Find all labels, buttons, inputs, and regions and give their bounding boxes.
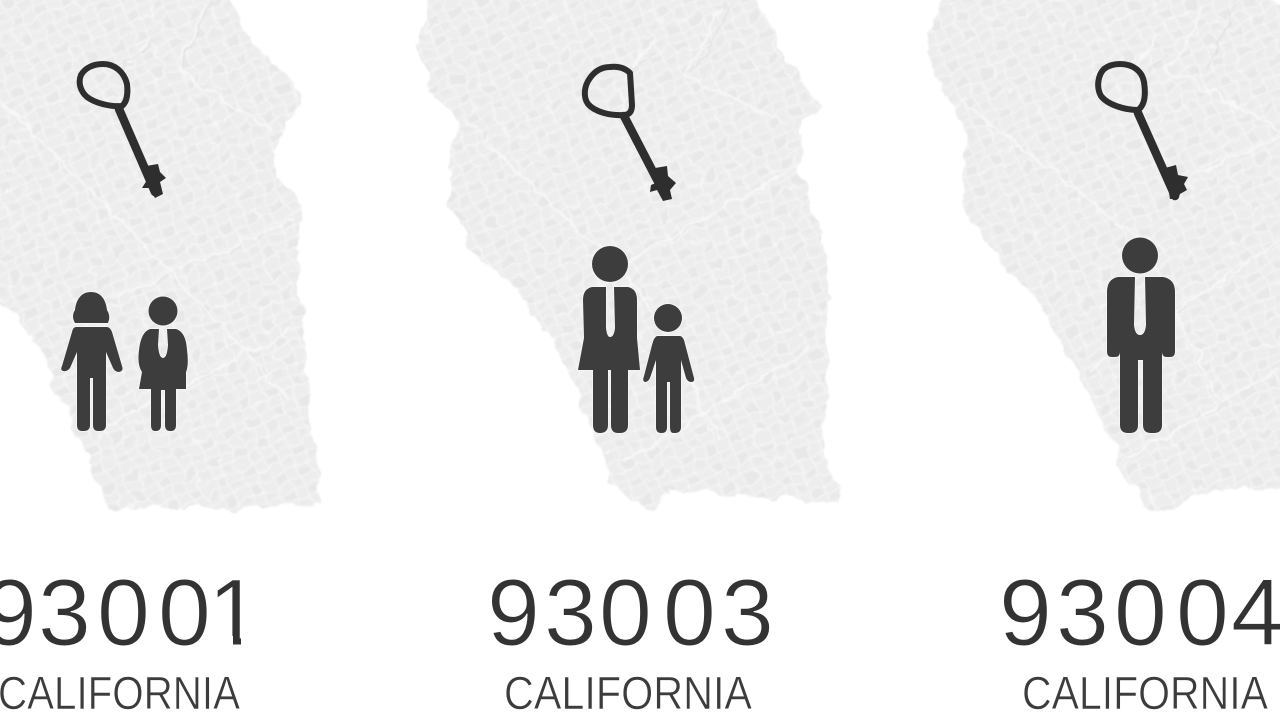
- panel: ZIP 93004: [927, 0, 1280, 719]
- map: 93004 area: [927, 0, 1280, 515]
- map: 93003 area: [418, 0, 840, 512]
- map: 93001 area: [0, 0, 322, 510]
- heading: 93003: 93003: [487, 560, 774, 666]
- icon: child figure: [138, 296, 188, 431]
- icon: key: [80, 64, 166, 198]
- label: California: CALIFORNIA: [504, 667, 752, 719]
- icon: man in suit: [1107, 238, 1175, 433]
- icon: key: [1098, 64, 1188, 199]
- label: California: CALIFORNIA: [0, 667, 240, 719]
- icon: child figure: [643, 304, 694, 433]
- icon: adult figure in suit and skirt: [578, 246, 640, 433]
- icon: key: [585, 67, 676, 201]
- icon: adult figure: [61, 292, 123, 431]
- panel: ZIP 93003: [418, 0, 840, 719]
- panel: ZIP 93001: [0, 0, 322, 719]
- heading: 93004: 93004: [999, 560, 1280, 666]
